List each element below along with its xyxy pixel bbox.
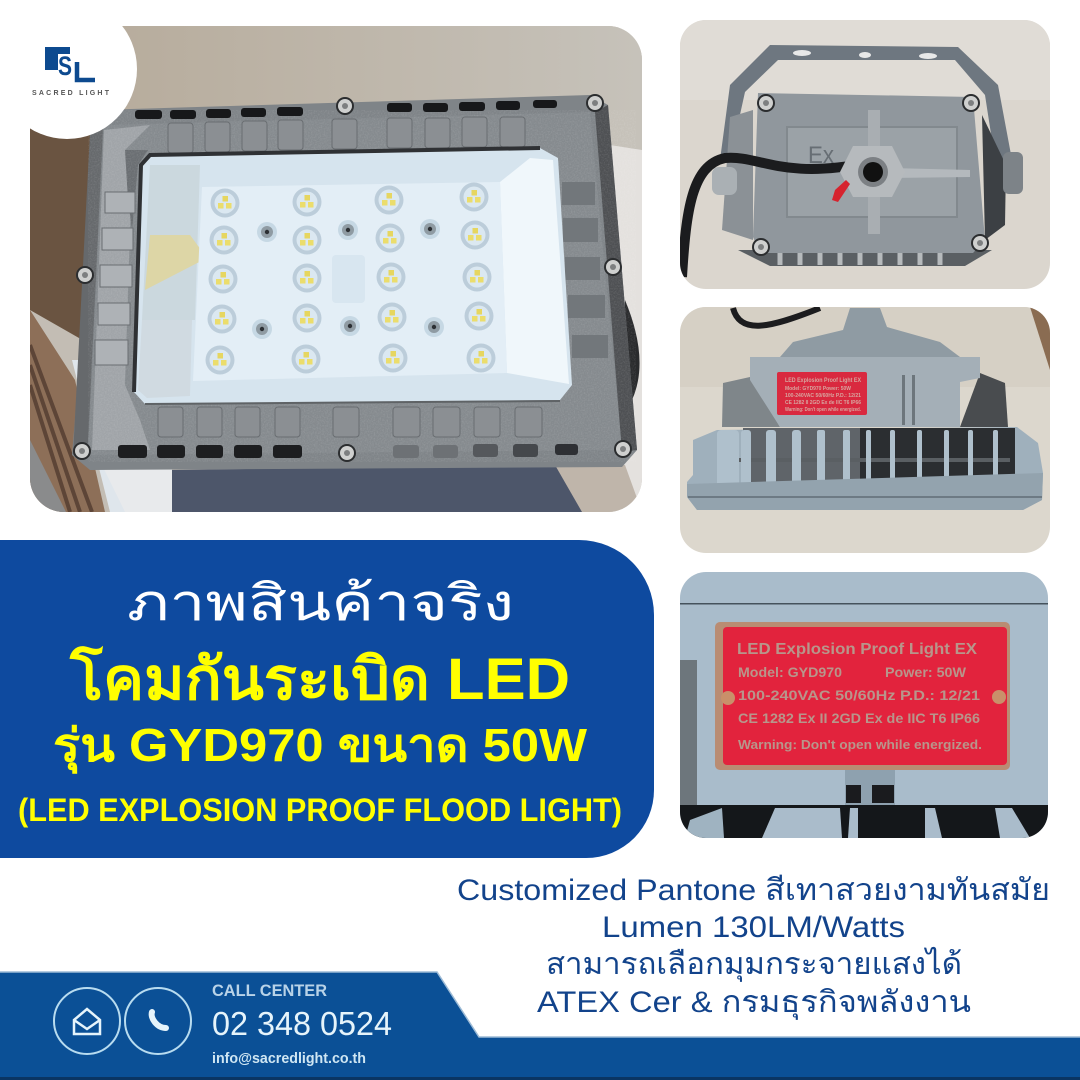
red nameplate: Power: 50W xyxy=(885,664,967,680)
icon: telephone xyxy=(125,988,191,1054)
logo badge: S xyxy=(58,51,72,81)
heading: product name: โคมกันระเบิด LED xyxy=(69,644,570,712)
top vent slots xyxy=(135,100,557,119)
red nameplate: LED Explosion Proof Light EX xyxy=(737,641,977,658)
red nameplate small: LED Explosion Proof Light EX xyxy=(785,378,861,384)
text block: product features: สามารถเลือกมุมกระจายแสงได้ xyxy=(546,946,962,983)
text: phone number: 02 348 0524 xyxy=(212,1005,392,1042)
heat sink xyxy=(687,427,1043,510)
icon: open envelope xyxy=(54,988,120,1054)
red nameplate xyxy=(715,622,1010,770)
cable gland xyxy=(840,146,905,197)
heading: model and wattage: รุ่น GYD970 ขนาด 50W xyxy=(53,719,588,774)
LED lenses xyxy=(206,182,496,374)
mounting bracket xyxy=(720,45,1012,160)
text block: product features xyxy=(457,874,1050,1021)
photo: nameplate close-up xyxy=(680,572,1048,838)
cooling fins xyxy=(738,250,992,266)
photo: lamp back view xyxy=(680,20,1050,289)
red nameplate small: 100-240VAC 50/60Hz P.D.: 12/21 xyxy=(785,393,861,399)
red nameplate small: Warning: Don't open while energized. xyxy=(785,407,862,413)
earth tag xyxy=(832,180,850,202)
red nameplate: CE 1282 Ex II 2GD Ex de IIC T6 IP66 xyxy=(738,710,980,726)
cable xyxy=(733,308,820,326)
heading: English product name: (LED EXPLOSION PROOF FLOOD LIGHT) xyxy=(18,792,622,828)
side mounts xyxy=(722,373,1008,427)
housing ribs xyxy=(95,117,542,437)
red nameplate: Model: GYD970 xyxy=(738,664,842,680)
red nameplate: Warning: Don't open while energized. xyxy=(738,737,982,752)
red nameplate: 100-240VAC 50/60Hz P.D.: 12/21 xyxy=(738,687,980,703)
photo: lamp side view xyxy=(680,307,1050,553)
text: email: info@sacredlight.co.th xyxy=(212,1050,366,1067)
logo badge xyxy=(0,0,137,139)
bottom vent slots xyxy=(118,444,578,458)
red nameplate small: Model: GYD970 Power: 50W xyxy=(785,386,852,392)
red nameplate small xyxy=(777,372,867,415)
text block: product features: Customized Pantone สีเทาสวยงามทันสมัย xyxy=(457,874,1050,907)
cable xyxy=(682,158,867,277)
text: call center label: CALL CENTER xyxy=(212,981,327,1000)
back housing xyxy=(752,93,989,256)
photo: main lamp front view xyxy=(30,26,642,512)
panel screws xyxy=(252,219,444,339)
upper housing xyxy=(750,308,980,427)
logo badge: SACRED LIGHT xyxy=(32,90,110,97)
housing bolts xyxy=(73,94,632,462)
back housing: Ex xyxy=(808,142,834,169)
glass window and LED panel xyxy=(134,148,572,404)
panel: title banner xyxy=(0,540,654,858)
heading: real product photos: ภาพสินค้าจริง xyxy=(127,575,514,631)
side mounts xyxy=(712,110,1023,240)
text block: product features: ATEX Cer & กรมธุรกิจพลังงาน xyxy=(537,986,971,1021)
text block: product features: Lumen 130LM/Watts xyxy=(602,911,905,944)
lamp housing xyxy=(72,95,637,470)
right side ribs xyxy=(562,182,608,358)
red nameplate small: CE 1282 II 2GD Ex de IIC T6 IP66 xyxy=(785,400,861,406)
footer bar xyxy=(0,972,1080,1080)
